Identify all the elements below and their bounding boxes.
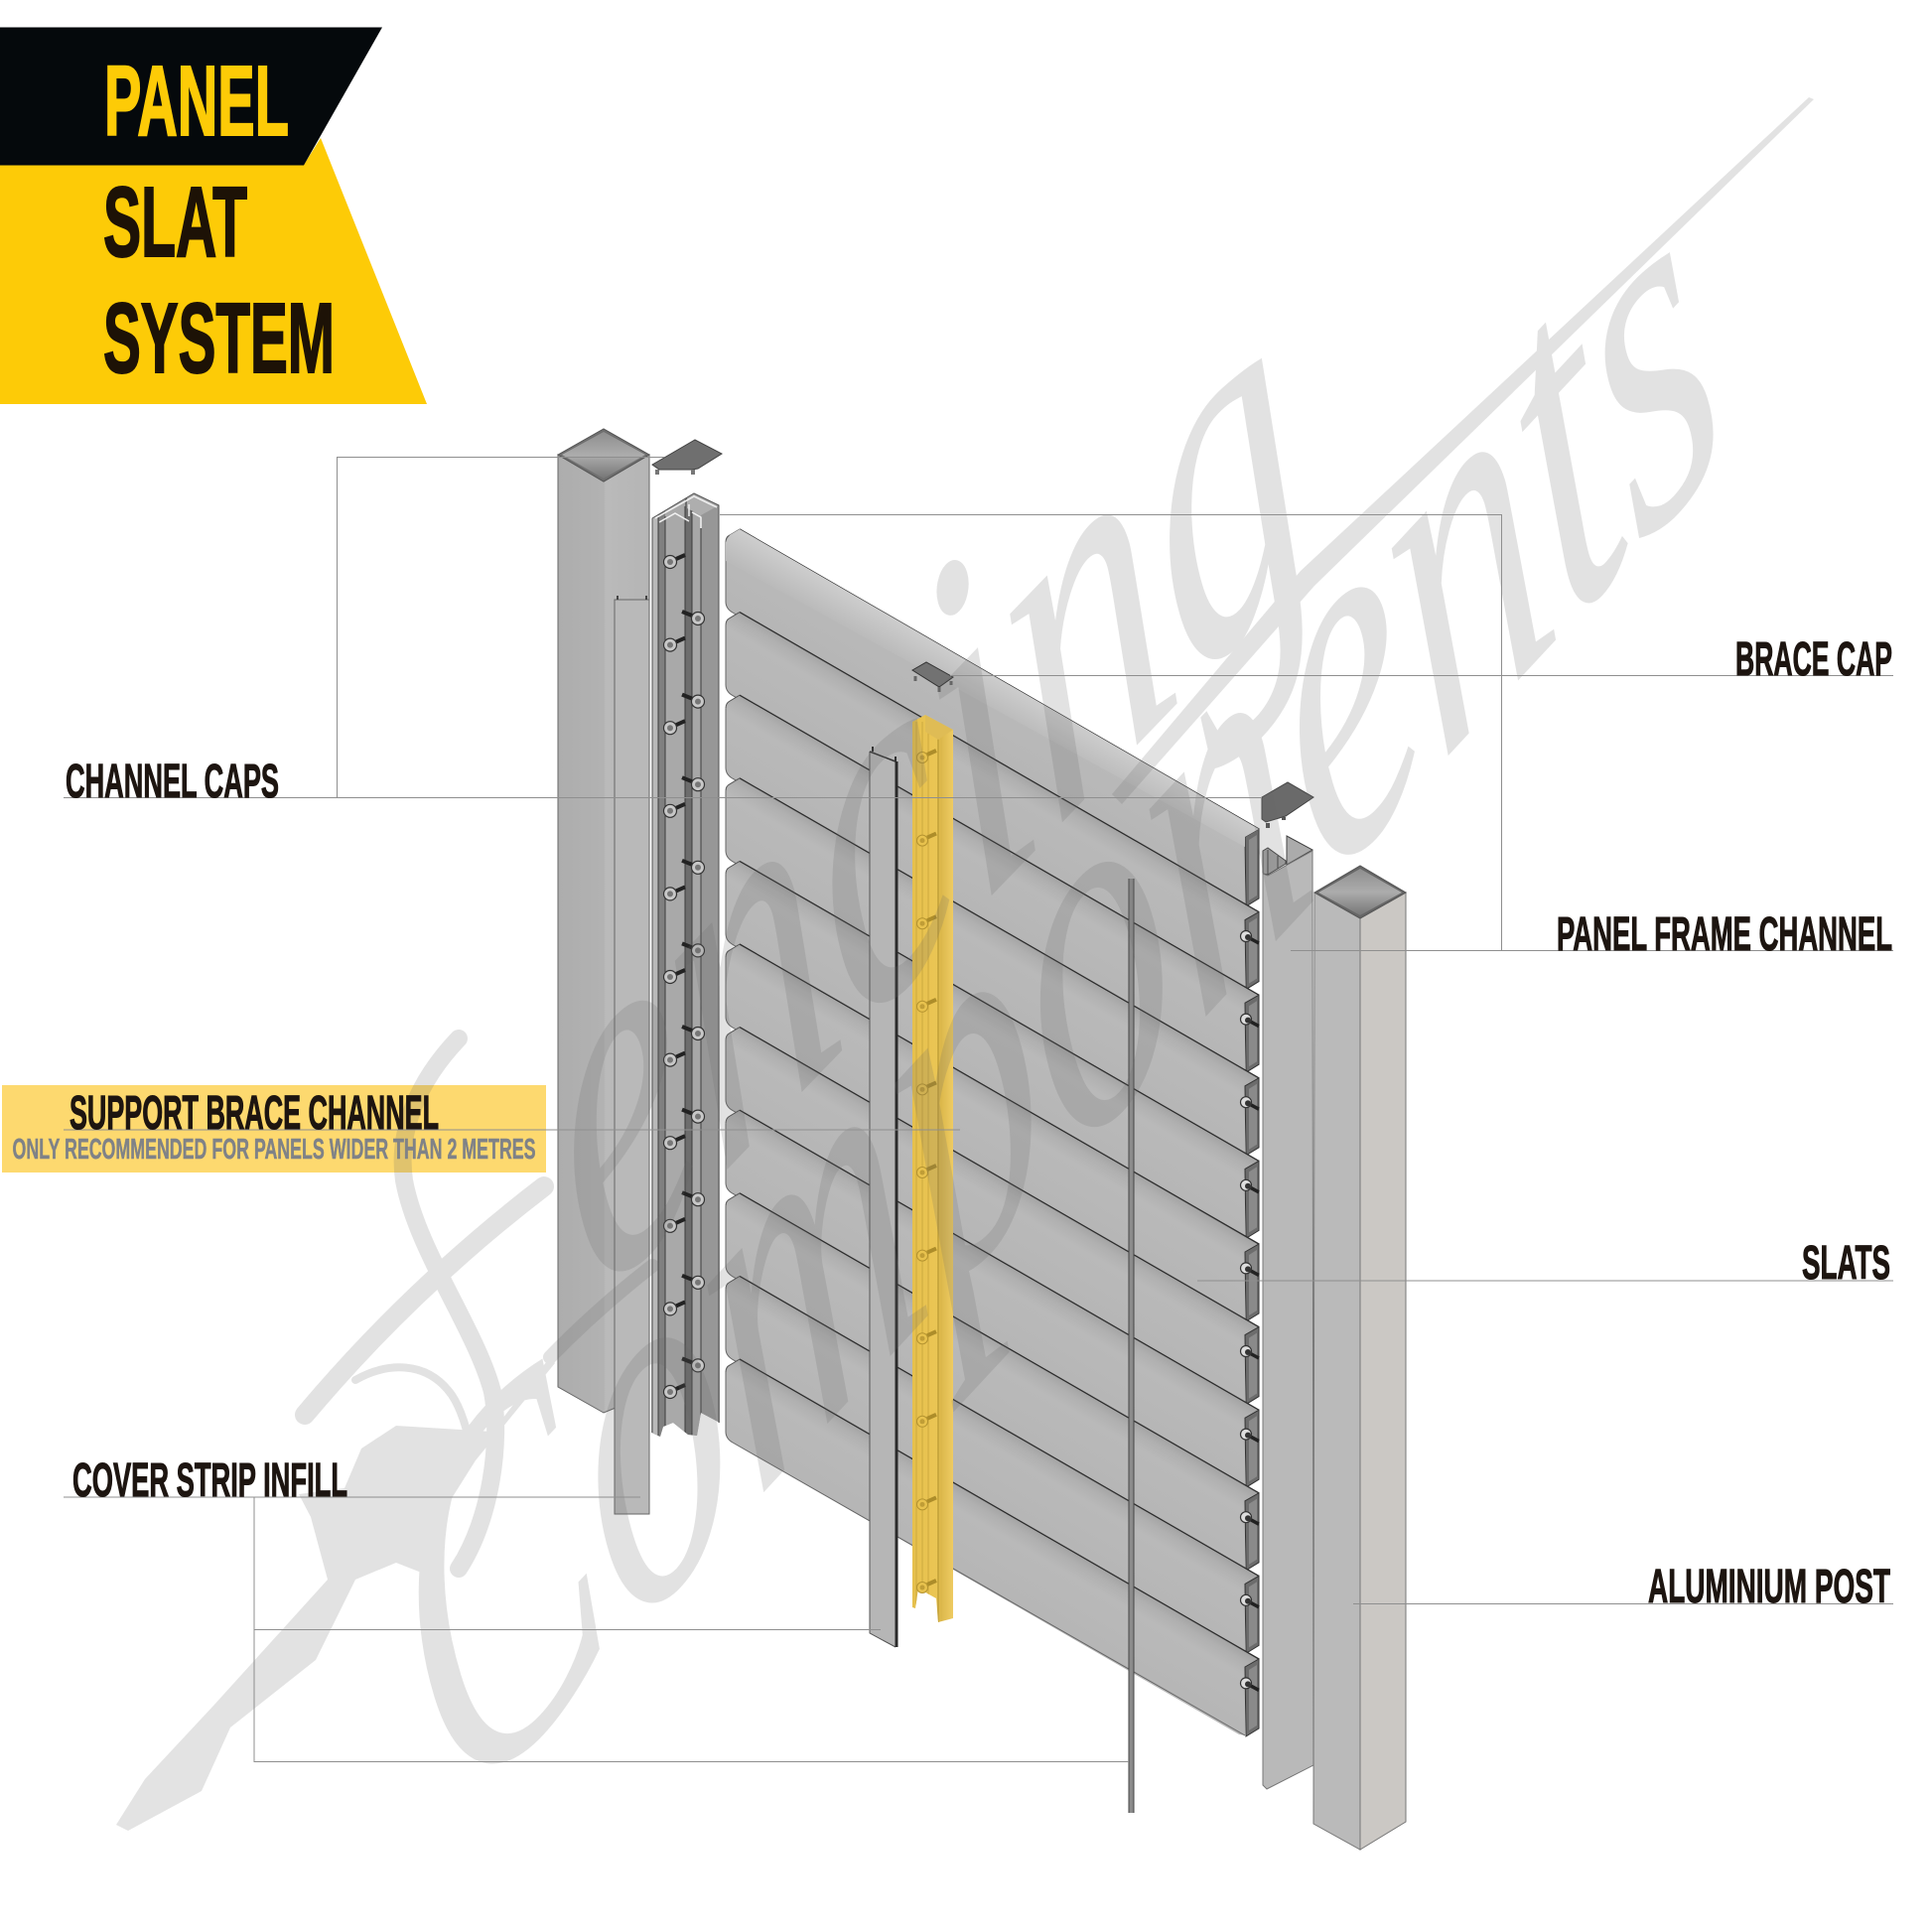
panel frame channel: left xyxy=(650,486,722,1440)
leader: cover strip infill xyxy=(64,1497,1129,1761)
leader: support brace channel xyxy=(64,1129,960,1131)
channel cap: left xyxy=(652,440,722,475)
aluminium post: left xyxy=(558,429,649,1413)
title word: SYSTEM: SYSTEM xyxy=(103,283,335,394)
leader: aluminium post xyxy=(1353,1602,1893,1604)
watermark stroke: long crossbar xyxy=(1112,97,1814,804)
leader lines xyxy=(64,457,1893,1761)
title: yellow block xyxy=(0,138,427,404)
title word: PANEL: PANEL xyxy=(104,46,289,157)
cover strip infill: centre xyxy=(870,747,897,1647)
label: support brace note: ONLY RECOMMENDED FOR PANELS WIDER THAN 2 METRES xyxy=(12,1134,536,1166)
brace cap xyxy=(912,662,953,692)
support brace channel: yellow xyxy=(912,710,953,1628)
cover strip infill: left xyxy=(615,596,649,1514)
channel cap: right xyxy=(1262,782,1313,828)
label: support brace channel: SUPPORT BRACE CHANNEL xyxy=(69,1087,439,1140)
leader: slats xyxy=(1197,1280,1893,1282)
leader: channel caps xyxy=(64,457,1261,798)
leader: brace cap xyxy=(950,675,1893,677)
watermark word: Components: Components xyxy=(335,54,1768,1921)
right channel: front face xyxy=(1263,851,1313,1789)
aluminium post: right xyxy=(1313,866,1406,1850)
title banner xyxy=(0,28,427,404)
label: cover strip infill: COVER STRIP INFILL xyxy=(72,1454,347,1507)
top slat bevel xyxy=(726,529,1259,847)
watermark flourish: F xyxy=(116,1038,652,1831)
channel screws xyxy=(663,555,705,1398)
labels xyxy=(12,633,1892,1613)
right channel: inner box xyxy=(1263,848,1286,875)
title word: SLAT: SLAT xyxy=(103,167,247,278)
cover strip infill: rod xyxy=(1129,879,1134,1813)
watermark word: encing: encing xyxy=(483,157,1354,1402)
callout: support brace highlight xyxy=(2,1085,546,1173)
panel: slats xyxy=(726,529,1259,1736)
panel frame channel: right xyxy=(1263,836,1313,1789)
title: black block xyxy=(0,28,382,165)
slat end screws xyxy=(1241,931,1259,1690)
label: channel caps: CHANNEL CAPS xyxy=(66,756,279,808)
right channel: back wall xyxy=(1287,836,1312,865)
leader: panel frame channel xyxy=(720,514,1893,951)
